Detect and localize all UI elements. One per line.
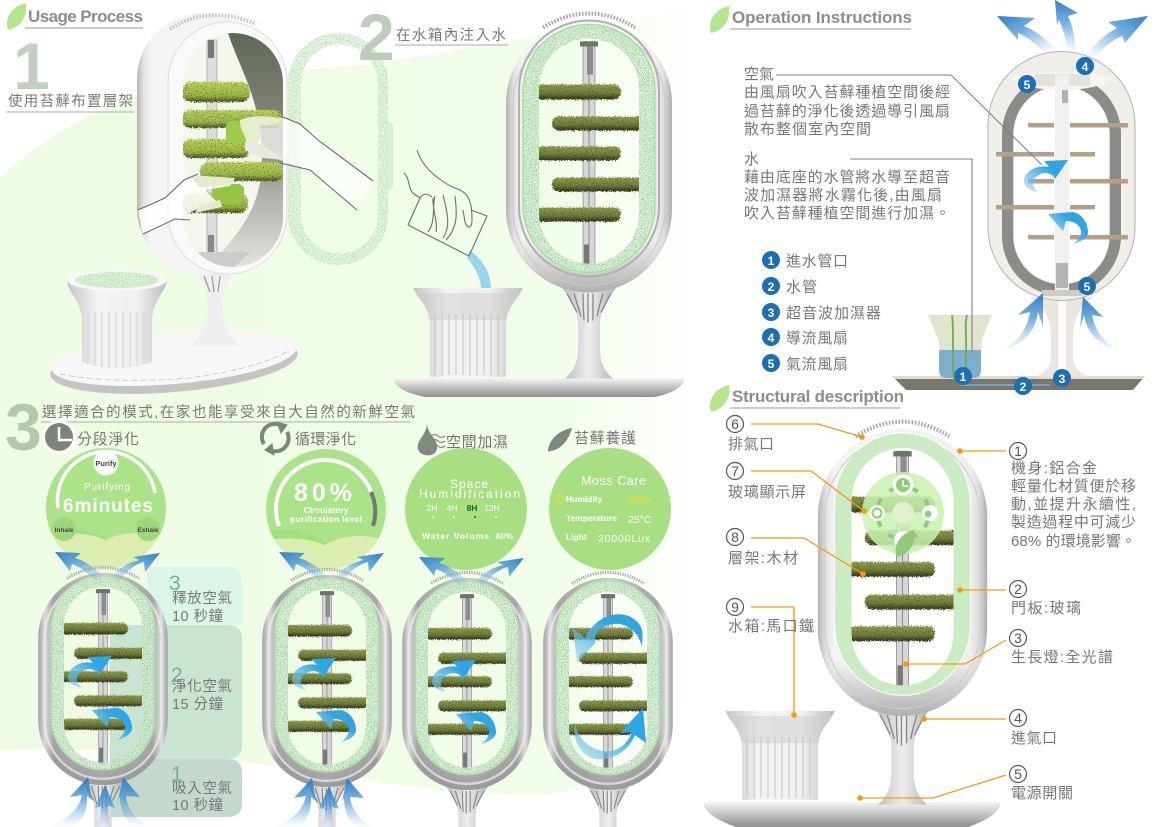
cutaway capsule xyxy=(988,52,1135,300)
mode icon: humidity drop xyxy=(418,424,445,455)
screen: moss care: ! xyxy=(559,497,561,504)
screen: purifying 6 minutes: Purify xyxy=(95,459,117,468)
mode step labels xyxy=(169,572,232,814)
numbered markers in cutaway: 5 xyxy=(1084,280,1091,294)
right callouts: 機身:鋁合金 xyxy=(1011,460,1097,477)
screen: moss care: Light xyxy=(566,532,587,542)
text: air description: 散布整個室內空間 xyxy=(744,121,871,138)
left callouts: 9 xyxy=(731,599,739,615)
screen: space humidification: Water Volume xyxy=(422,531,489,541)
device: segmented purification xyxy=(38,567,168,827)
panel: structural description xyxy=(704,385,1136,827)
screen: moss care: Humidity xyxy=(566,494,603,504)
heading: Usage Process: Usage Process xyxy=(28,7,143,26)
numbered markers in cutaway: 4 xyxy=(1082,60,1089,74)
right callouts: 4 xyxy=(1014,710,1022,726)
screen: purifying 6 minutes: 6minutes xyxy=(63,496,153,517)
right callouts: 動,並提升永續性, xyxy=(1011,496,1136,513)
panel: mode selection step 3 xyxy=(5,390,673,827)
device front view with moss xyxy=(506,14,672,379)
screen: moss care: Temperature xyxy=(566,513,617,523)
text: water description: 藉由底座的水管將水導至超音 xyxy=(744,168,950,186)
mode step labels: 10 秒鐘 xyxy=(172,608,224,625)
left callouts: 水箱:馬口鐵 xyxy=(728,617,814,635)
base plate and stem, angled view xyxy=(48,272,300,403)
right callouts: 生長燈:全光譜 xyxy=(1011,649,1113,666)
cutaway base and stem xyxy=(892,297,1145,390)
mode step labels: 淨化空氣 xyxy=(172,678,232,695)
screen: space humidification: 4H xyxy=(447,503,457,513)
right callouts: 2 xyxy=(1014,581,1022,597)
orange leader lines and dots xyxy=(751,424,1006,801)
mode step labels: 吸入空氣 xyxy=(172,780,232,797)
screen: purifying 6 minutes: Exhale xyxy=(138,527,159,534)
numbered markers in cutaway: 2 xyxy=(1020,380,1027,394)
left callouts: 7 xyxy=(731,463,739,479)
left callouts: 玻璃顯示屏 xyxy=(728,484,806,501)
right callouts: 1 xyxy=(1014,443,1022,459)
cutaway water tank xyxy=(928,315,992,385)
device front view with display xyxy=(818,422,987,805)
screen: purifying 6 minutes xyxy=(46,448,167,570)
legend: numbered parts xyxy=(762,251,881,373)
mode step labels: 10 秒鐘 xyxy=(172,797,224,814)
mode title 循環淨化: 循環淨化 xyxy=(295,431,356,448)
glass door, open xyxy=(288,33,393,265)
text: water description xyxy=(744,151,950,222)
right callouts: 製造過程中可減少 xyxy=(1011,514,1136,531)
right callouts: 68% 的環境影響。 xyxy=(1011,532,1136,550)
text: air description: 由風扇吹入苔蘚種植空間後經 xyxy=(744,84,950,101)
airflow arrows in cutaway xyxy=(997,0,1148,352)
mode step labels: 1 xyxy=(171,763,183,786)
screen: circulatory 80%: Circulatory xyxy=(304,505,349,515)
water tank xyxy=(725,711,835,800)
text: water description: 波加濕器將水霧化後,由風扇 xyxy=(744,187,942,204)
step 2 caption: 在水箱內注入水 xyxy=(396,26,506,44)
screen: space humidification: Humidification xyxy=(419,487,520,501)
right callouts: 5 xyxy=(1014,766,1022,782)
screen: purifying 6 minutes: Purifying xyxy=(84,482,130,493)
left callouts: 8 xyxy=(731,529,739,545)
screen: space humidification: 12H xyxy=(484,503,500,513)
legend: numbered parts: 4 xyxy=(768,331,775,345)
mode title 空間加濕: 空間加濕 xyxy=(446,434,508,451)
step 1 caption: 使用苔蘚布置層架 xyxy=(8,93,133,110)
legend: numbered parts: 超音波加濕器 xyxy=(786,305,881,322)
step number 2: 2 xyxy=(358,0,395,74)
legend: numbered parts: 氣流風扇 xyxy=(786,356,848,373)
step number 1: 1 xyxy=(13,29,50,103)
text: water description: 水 xyxy=(744,151,759,168)
heading: Usage Process xyxy=(7,3,143,30)
left callouts: 排氣口 xyxy=(728,436,774,453)
mode step labels: 釋放空氣 xyxy=(172,590,232,607)
mode icon: clock xyxy=(42,420,76,454)
hands placing moss xyxy=(138,116,373,234)
device open, angled view xyxy=(137,13,287,275)
mode icon: leaf xyxy=(548,428,572,452)
screen: space humidification xyxy=(405,448,527,570)
heading: Operation Instructions: Operation Instructions xyxy=(732,8,912,27)
right callouts: 門板:玻璃 xyxy=(1011,600,1081,617)
airflow arrows inside devices xyxy=(68,614,646,759)
mode step labels: 2 xyxy=(171,664,183,687)
text: air description xyxy=(744,66,950,138)
step 3 caption: 選擇適合的模式,在家也能享受來自大自然的新鮮空氣 xyxy=(42,403,415,421)
legend: numbered parts: 1 xyxy=(768,254,775,268)
panel: operation instructions xyxy=(710,0,1148,395)
right callouts xyxy=(1010,442,1136,802)
legend: numbered parts: 2 xyxy=(768,280,775,294)
device: humidification xyxy=(402,572,532,827)
heading: Operation Instructions xyxy=(710,6,912,33)
heading: Structural description: Structural description xyxy=(732,387,904,406)
screen: moss care xyxy=(549,448,671,570)
text: air description: 過苔蘚的淨化後透過導引風扇 xyxy=(744,103,950,120)
text: water description: 吹入苔蘚種植空間進行加濕。 xyxy=(744,205,950,222)
right callouts: 電源開關 xyxy=(1011,785,1073,802)
mode title 分段淨化: 分段淨化 xyxy=(77,431,139,448)
mode title 苔蘚養護: 苔蘚養護 xyxy=(574,429,636,447)
screen: space humidification: 80% xyxy=(496,531,513,541)
water tank, angled view xyxy=(67,269,167,368)
heading: Structural description xyxy=(710,385,904,412)
screen: moss care: Moss Care xyxy=(581,474,646,488)
base plate xyxy=(704,802,1000,827)
water tank xyxy=(413,288,523,377)
legend: numbered parts: 進水管口 xyxy=(786,252,848,270)
screen: circulatory 80%: purification level xyxy=(290,514,362,524)
numbered markers in cutaway xyxy=(954,57,1096,395)
base plate xyxy=(394,378,684,397)
screen: space humidification: 2H xyxy=(427,503,437,513)
legend: numbered parts: 5 xyxy=(768,357,775,371)
right callouts: 3 xyxy=(1014,630,1022,646)
mode timing blocks xyxy=(110,567,242,817)
airflow arrows: exhaust xyxy=(55,552,524,586)
device: circulating purification xyxy=(262,569,392,827)
screen: moss care: 25°C xyxy=(628,514,652,526)
panel: usage process step 1 xyxy=(6,3,393,403)
screen: moss care: 20000Lux xyxy=(598,533,651,545)
wooden shelves xyxy=(996,123,1128,240)
left callouts xyxy=(726,416,814,635)
mode step labels: 15 分鐘 xyxy=(172,696,224,713)
numbered markers in cutaway: 1 xyxy=(960,370,967,384)
device: moss care xyxy=(543,572,673,827)
moss shelves xyxy=(182,82,284,213)
legend: numbered parts: 水管 xyxy=(786,278,817,296)
poured water xyxy=(467,250,491,288)
left callouts: 6 xyxy=(731,416,739,432)
legend: numbered parts: 導流風扇 xyxy=(786,330,848,347)
screen: circulatory 80%: 80% xyxy=(294,479,352,507)
numbered markers in cutaway: 3 xyxy=(1059,372,1066,386)
screen: space humidification: 8H xyxy=(467,503,477,513)
legend: numbered parts: 3 xyxy=(768,306,775,320)
glass display screen xyxy=(862,472,944,557)
right callouts: 進氣口 xyxy=(1011,730,1057,747)
left callouts: 層架:木材 xyxy=(728,550,798,567)
hand pouring water xyxy=(404,150,487,256)
screen: circulatory 80% xyxy=(266,449,386,570)
screen: moss care: 60% xyxy=(629,494,650,506)
mode step labels: 3 xyxy=(169,572,181,595)
airflow arrows: intake xyxy=(50,777,374,827)
screen: purifying 6 minutes: Inhale xyxy=(55,527,74,534)
text: air description: 空氣 xyxy=(744,66,774,83)
numbered markers in cutaway: 5 xyxy=(1024,78,1031,92)
mode icon: cycle xyxy=(262,422,289,455)
screen: space humidification: Space xyxy=(450,477,488,491)
right callouts: 輕量化材質便於移 xyxy=(1011,477,1136,495)
leader lines xyxy=(776,75,1042,353)
background pale green field xyxy=(0,8,700,795)
panel: usage process step 2 xyxy=(358,0,684,397)
step number 3: 3 xyxy=(5,390,42,464)
